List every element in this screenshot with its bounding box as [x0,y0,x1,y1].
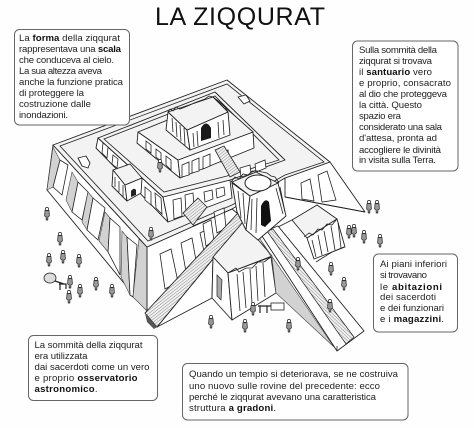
right gate wall to stair base [316,247,344,262]
callout: santuario [352,41,458,171]
callout: forma: costruzione dalle [19,99,91,110]
central stair side shadow [258,236,334,347]
callout: abitazioni e magazzini [374,254,458,332]
callout: osservatorio astronomico: dai sacerdoti come un vero [34,362,150,373]
callout: santuario: e proprio, consacrato [359,78,451,89]
callout: forma: rappresentava una scala [19,44,122,55]
tower door [261,200,271,227]
callout: abitazioni e magazzini: si trovavano [380,270,427,281]
callout: forma: di proteggere la [19,88,85,99]
callout: santuario: ziqqurat si trovava [359,56,433,67]
sanctuary door [201,124,211,141]
right outer wall [285,162,365,212]
front outer wall [147,209,243,327]
callout: abitazioni e magazzini: e dei funzionari [380,303,444,314]
callout: struttura a gradoni: perché le ziqqurat avevano una caratteristica [189,392,377,403]
sanctuary at summit [166,96,230,150]
callout: abitazioni e magazzini: dei sacerdoti [380,292,436,303]
callout: osservatorio astronomico: era utilizzata [34,351,88,362]
cart left [44,273,66,290]
callout: struttura a gradoni: Quando un tempio si deteriorava, se ne costruiva [189,369,399,380]
callout: santuario: il santuario vero [359,67,432,78]
callout: forma [14,30,130,125]
central stair [260,226,364,351]
right pavilion [276,197,365,259]
human figures and carts [44,159,382,332]
top platform surface [53,80,330,247]
callout: forma: La sua altezza aveva [19,66,103,77]
left outer wall [47,145,147,311]
callout: santuario: d'attesa, pronta ad [359,133,437,144]
callout: struttura a gradoni: struttura a gradoni. [189,403,276,414]
callout: osservatorio astronomico [28,336,158,400]
callout: santuario: Sulla sommità della [359,45,438,56]
callout: forma: anche la funzione pratica [19,77,124,88]
lower terrace wall and niches [193,208,232,246]
small stair on middle tier [183,198,207,225]
callout: santuario: la città. Questo [359,100,422,111]
front pavilion [212,222,276,320]
callout: osservatorio astronomico: La sommità della ziqqurat [34,340,143,351]
upper tier [137,100,254,178]
callout: santuario: considerato una sala [359,122,443,133]
title: LA ZIQQURAT [155,3,325,31]
callout: forma: che conduceva al cielo. [19,55,114,66]
middle tier [96,92,285,222]
lower left side stair [145,213,248,329]
stairs between upper tier and gate [215,146,240,177]
callout: forma: La forma della ziqqurat [19,33,120,44]
callout: forma: inondazioni. [19,110,68,121]
callout: santuario: in visita sulla Terra. [359,155,436,166]
small building on middle tier [112,164,142,201]
illustration: ziggurat [44,80,382,351]
callout: abitazioni e magazzini: Ai piani inferiori [380,259,447,270]
callout: abitazioni e magazzini: le abitazioni [380,282,442,293]
cart right [258,303,284,313]
callout: osservatorio astronomico: e proprio osservatorio [34,373,138,384]
callout: abitazioni e magazzini: e i magazzini. [380,314,444,325]
callout: struttura a gradoni: uno nuovo sulle rovine del precedente: ecco [189,381,380,392]
entrance tower [231,171,286,240]
callout: santuario: al dio che proteggeva [359,89,448,100]
callout: struttura a gradoni [182,364,408,420]
callout: santuario: spazio era [359,111,402,122]
callout: santuario: accogliere le divinità [359,145,442,156]
callout: osservatorio astronomico: astronomico. [34,384,98,395]
